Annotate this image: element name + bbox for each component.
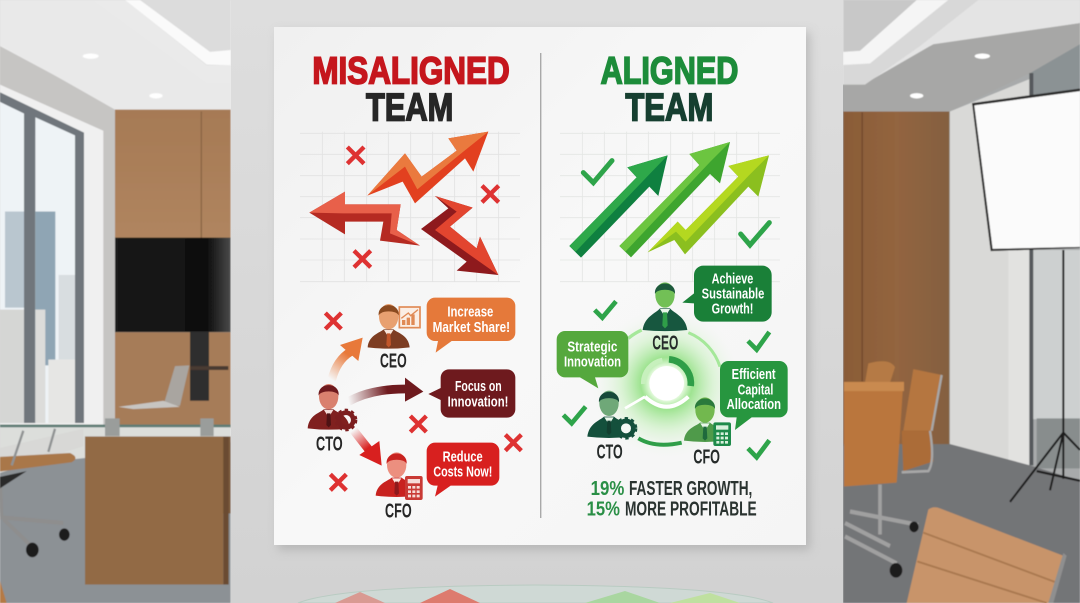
graphic: glowing alignment rings [590, 307, 743, 460]
speech bubble: achieve sustainable growth: Sustainable [702, 286, 764, 302]
label: CFO: CFO [385, 500, 412, 523]
check marks: upper right [583, 161, 769, 245]
title: misaligned team: MISALIGNED [312, 51, 510, 93]
arrow: mid green [619, 142, 730, 257]
arrow: red zigzag left [309, 192, 420, 246]
speech bubble: efficient capital allocation: Efficient [732, 367, 776, 383]
speech bubble: strategic innovation: Strategic [567, 340, 617, 356]
speech bubble: efficient capital allocation [720, 361, 788, 430]
grid: aligned [560, 132, 780, 282]
speech bubble: increase market share [427, 298, 515, 353]
speech bubble: focus on innovation: Innovation! [448, 395, 508, 411]
callout: growth statistics: 15% [587, 499, 620, 521]
speech bubble: reduce costs now: Costs Now! [433, 465, 492, 481]
grid: misaligned [300, 132, 520, 282]
background: central grey wall [231, 0, 843, 603]
speech bubble: increase market share: Market Share! [433, 320, 510, 336]
speech bubble: achieve sustainable growth: Growth! [712, 301, 753, 317]
poster board [274, 27, 810, 550]
speech bubble: achieve sustainable growth [682, 266, 772, 322]
callout: growth statistics: 19% [591, 478, 625, 500]
arrow: orange zigzag up [367, 132, 488, 203]
icon: CEO person with chart [368, 304, 420, 349]
cross marks: lower left [325, 313, 521, 490]
callout: growth statistics: FASTER GROWTH, [629, 478, 752, 500]
icon: CTO person with gear [587, 391, 636, 438]
glass table reflection at bottom [298, 585, 773, 603]
background: left office room [0, 0, 233, 603]
arrow: dark red zigzag down [421, 196, 498, 275]
arrow: dark green [569, 155, 668, 258]
speech bubble: reduce costs now: Reduce [443, 450, 483, 466]
panel: misaligned executives [308, 298, 521, 523]
label: CEO: CEO [380, 350, 407, 373]
callout: growth statistics: MORE PROFITABLE [625, 499, 757, 521]
background: right office room [840, 0, 1080, 603]
label: CFO: CFO [693, 445, 720, 468]
panel: misaligned team upper [300, 51, 520, 282]
check marks: lower right [563, 301, 769, 457]
panel: aligned executives [557, 266, 788, 521]
speech bubble: strategic innovation [557, 331, 628, 388]
speech bubble: focus on innovation: Focus on [455, 379, 502, 395]
icon: CTO person with gear [308, 384, 356, 430]
callout: growth statistics [587, 478, 757, 521]
cross marks: upper left [347, 147, 499, 267]
speech bubble: strategic innovation: Innovation [564, 355, 621, 371]
arrow: CTO to CFO [353, 430, 382, 466]
icon: CFO person with calculator [376, 452, 423, 500]
label: CTO: CTO [316, 432, 343, 455]
title: aligned team: TEAM [625, 85, 713, 129]
label: CTO: CTO [597, 440, 623, 463]
speech bubble: increase market share: Increase [447, 305, 493, 321]
label: CEO: CEO [652, 331, 678, 354]
speech bubble: efficient capital allocation: Allocation [727, 397, 781, 413]
arrow: CTO to CEO [332, 338, 363, 380]
speech bubble: achieve sustainable growth: Achieve [712, 271, 753, 287]
panel: aligned team upper [560, 51, 780, 282]
arrow: CTO to innovation [348, 378, 423, 402]
title: aligned team: ALIGNED [601, 51, 738, 93]
icon: CEO person [643, 282, 687, 331]
arrow: lime zigzag [648, 155, 769, 254]
speech bubble: focus on innovation [428, 369, 515, 418]
speech bubble: efficient capital allocation: Capital [738, 382, 773, 398]
centre divider [540, 53, 541, 518]
title: aligned team [601, 51, 738, 129]
icon: CFO person with calculator [684, 397, 731, 446]
title: misaligned team: TEAM [366, 85, 453, 129]
title: misaligned team [312, 51, 510, 129]
speech bubble: reduce costs now [427, 443, 499, 497]
